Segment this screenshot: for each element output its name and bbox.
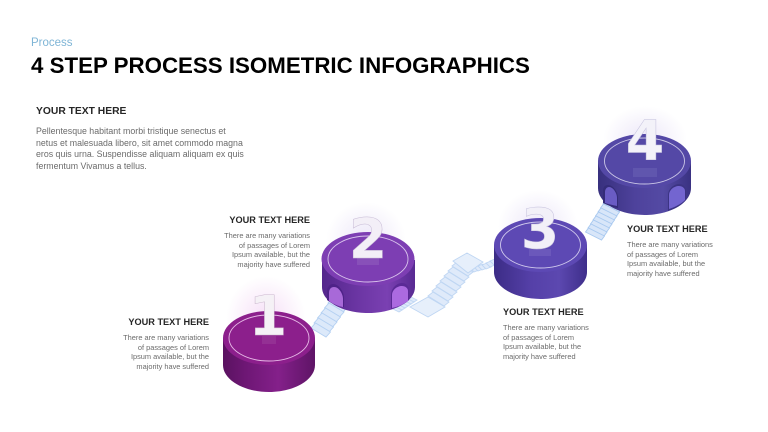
text block: step 3: majority have suffered	[503, 352, 576, 361]
stairs: step 3 to 4	[586, 200, 622, 240]
text block: step 4	[627, 224, 713, 278]
text block: step 4: There are many variations	[627, 240, 713, 249]
number 2: 2	[349, 207, 387, 271]
stairs: step 1 to 2	[311, 298, 348, 337]
text block: step 2: Ipsum available, but the	[232, 250, 310, 259]
intro text block: fermentum Vivamus a tellus.	[36, 161, 147, 171]
text block: step 1: majority have suffered	[136, 362, 209, 371]
text block: step 4: majority have suffered	[627, 269, 700, 278]
number 3: 3	[521, 197, 559, 261]
text block: step 1: YOUR TEXT HERE	[128, 317, 209, 327]
text block: step 2: majority have suffered	[237, 260, 310, 269]
intro text block	[36, 106, 244, 171]
cylinder step 2	[322, 202, 415, 313]
text block: step 3: of passages of Lorem	[503, 333, 574, 342]
text block: step 4: YOUR TEXT HERE	[627, 224, 708, 234]
title: 4 STEP PROCESS ISOMETRIC INFOGRAPHICS	[31, 53, 530, 78]
text block: step 3: YOUR TEXT HERE	[503, 307, 584, 317]
text block: step 3: There are many variations	[503, 323, 589, 332]
cylinder step 3	[494, 190, 587, 299]
text block: step 4: of passages of Lorem	[627, 250, 698, 259]
stairs: step 2 to 3	[393, 253, 499, 317]
text block: step 1: of passages of Lorem	[138, 343, 209, 352]
section label: Process	[31, 37, 73, 49]
text block: step 2: There are many variations	[224, 231, 310, 240]
number 1: 1	[249, 284, 287, 348]
cylinder step 1	[223, 276, 315, 392]
number 4: 4	[626, 109, 664, 173]
text block: step 2: of passages of Lorem	[239, 241, 310, 250]
text block: step 3	[503, 307, 589, 361]
text block: step 2	[224, 215, 310, 269]
text block: step 1: There are many variations	[123, 333, 209, 342]
intro text block: Pellentesque habitant morbi tristique senectus et	[36, 126, 226, 136]
text block: step 1: Ipsum available, but the	[131, 352, 209, 361]
intro text block: netus et malesuada libero, sit amet commodo magna	[36, 138, 243, 148]
intro text block: YOUR TEXT HERE	[36, 106, 126, 117]
text block: step 3: Ipsum available, but the	[503, 342, 581, 351]
text block: step 1	[123, 317, 209, 371]
intro text block: eros quis urna. Suspendisse aliquam aliquam ex quis	[36, 149, 244, 159]
text block: step 2: YOUR TEXT HERE	[229, 215, 310, 225]
text block: step 4: Ipsum available, but the	[627, 259, 705, 268]
cylinder step 4	[598, 106, 691, 215]
